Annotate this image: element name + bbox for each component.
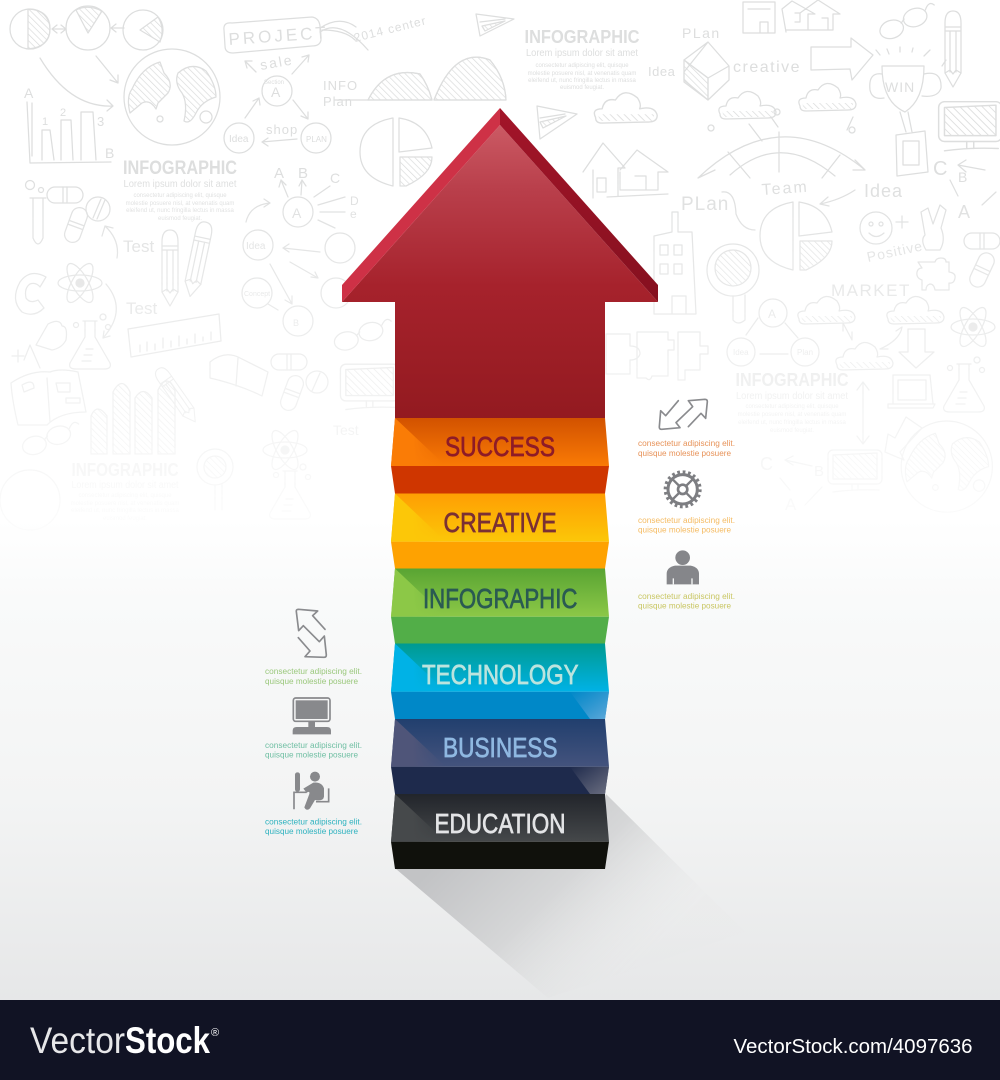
- doodle: trophy: [870, 47, 946, 176]
- doodle: section A diagram: [224, 51, 331, 153]
- big red arrow: [342, 108, 658, 418]
- doodle: bar chart: B: [105, 145, 114, 161]
- doodle: section A network: Idea: [246, 241, 266, 252]
- icon: person at desk: [294, 772, 329, 810]
- doodle: letters C A B with arrows: A: [958, 202, 970, 222]
- doodle: market: MARKET: [831, 281, 911, 300]
- doodle: hatched bars: [91, 381, 175, 454]
- doodle: info block right: euismod feugiat.: [770, 428, 814, 434]
- callout text: amber: quisque molestie posuere: [638, 524, 731, 534]
- doodle: section A network: B: [293, 318, 299, 328]
- doodle: lower right letters: A: [785, 495, 797, 514]
- doodle: cloud and house: [583, 93, 668, 198]
- doodle: glasses and pencil: [876, 2, 961, 87]
- doodle: info block top centre: eleifend ut, nunc fringilla lectus in massa: [528, 78, 637, 84]
- doodle: atom and flask right: [944, 304, 995, 412]
- doodle: info block left: Lorem ipsum dolor sit amet: [124, 179, 237, 190]
- doodle: info block right: molestie posuere nisl, at venenatis quam: [738, 412, 846, 418]
- callout text: olive: quisque molestie posuere: [638, 600, 731, 610]
- doodle: lower right letters: C: [760, 454, 773, 474]
- doodle: info block top centre: [524, 27, 640, 91]
- doodle: center domes: 2014 center: [352, 13, 428, 45]
- doodle: info block left: INFOGRAPHIC: [123, 158, 237, 179]
- doodle: info block right: INFOGRAPHIC: [736, 370, 849, 390]
- doodle: smiley, peace and positive: [860, 205, 946, 265]
- doodle: letters C A B with arrows: B: [958, 169, 967, 185]
- doodle: section A triangle: A: [768, 307, 776, 321]
- doodle: info block top centre: INFOGRAPHIC: [524, 27, 640, 47]
- doodle: smiley, peace and positive: Positive: [865, 237, 924, 265]
- doodle: info block lower left: euismod feugiat.: [103, 516, 147, 522]
- arrow left bevel: [342, 108, 500, 302]
- doodle: section A triangle: [727, 299, 819, 366]
- callout text: teal green: quisque molestie posuere: [265, 750, 358, 760]
- doodle: section A network: A: [292, 205, 302, 221]
- doodle: center domes: [335, 13, 506, 100]
- callout text: cyan: quisque molestie posuere: [265, 826, 358, 836]
- callout text: olive: [638, 591, 735, 610]
- doodle: cube with plan and creative: PLan: [682, 25, 721, 41]
- icon: gear: [666, 472, 700, 506]
- doodle: section A network: A: [274, 165, 284, 182]
- doodle: building and magnifier: [654, 212, 759, 323]
- footer logo: Vector: [30, 1020, 125, 1061]
- doodle: cube with plan and creative: Idea: [648, 64, 676, 79]
- callout text: light green: consectetur adipiscing elit.: [265, 666, 362, 676]
- right callouts: [638, 399, 735, 610]
- callout text: orange: consectetur adipiscing elit.: [638, 438, 735, 448]
- callout text: orange: quisque molestie posuere: [638, 448, 731, 458]
- step: technology: [391, 644, 609, 719]
- doodle: section A network: Concept: [244, 291, 270, 298]
- callout text: teal green: consectetur adipiscing elit.: [265, 740, 362, 750]
- doodle: cube with plan and creative: creative: [733, 59, 801, 76]
- doodle: section A network: B: [298, 165, 308, 182]
- doodle: info block left: [123, 158, 237, 222]
- callout text: cyan: [265, 816, 362, 836]
- footer logo: ®: [211, 1027, 219, 1039]
- step: infographic: INFOGRAPHIC: [423, 583, 578, 614]
- doodle: info block left: eleifend ut, nunc fringilla lectus in massa: [126, 208, 235, 214]
- doodle: section A network: [242, 165, 359, 336]
- doodle: paper planes: [476, 14, 577, 139]
- doodle: info block lower left: molestie posuere nisl, at venenatis quam: [71, 501, 179, 507]
- icon: arrows: [659, 399, 707, 429]
- footer bar: [0, 1000, 1000, 1080]
- doodle: team pie and labels: Idea: [864, 181, 903, 201]
- doodle: pencils with test label: [123, 220, 214, 306]
- doodle: info plan: Plan: [323, 94, 353, 109]
- doodle: section A triangle: Plan: [797, 348, 813, 357]
- doodle: section A diagram: sale: [259, 51, 295, 73]
- doodle: bar chart: 3: [97, 114, 104, 129]
- doodle: laptop: [888, 375, 935, 408]
- background doodles: [10, 0, 1000, 476]
- step: success: SUCCESS: [445, 431, 555, 462]
- doodle: block arrow: [811, 38, 873, 80]
- doodle: section A network: D: [350, 194, 359, 208]
- doodle: section A diagram: PLAN: [306, 135, 327, 144]
- doodle: C atom AB flask left: [12, 260, 116, 369]
- arrow right bevel: [500, 108, 658, 302]
- doodle: glasses and monitor centre: [332, 318, 399, 438]
- doodle: section A diagram: shop: [266, 122, 298, 137]
- doodle: centre left book pills pencil atom: [153, 354, 328, 519]
- footer logo: Stock: [125, 1020, 210, 1061]
- icon: computer: [293, 698, 331, 734]
- doodle: top right buildings: [743, 0, 840, 33]
- doodle: info plan: [324, 81, 356, 106]
- doodle: cube with plan and creative: [648, 25, 801, 100]
- callout text: light green: quisque molestie posuere: [265, 676, 358, 686]
- doodle: team pie and labels: [681, 179, 903, 270]
- step: education: [391, 794, 609, 869]
- doodle: bar chart: A: [24, 85, 34, 101]
- doodle: bar chart: 2: [60, 107, 66, 119]
- doodle: ruler: [126, 299, 221, 357]
- doodle: info block top centre: euismod feugiat.: [560, 85, 604, 91]
- doodle: lower right letters: B: [814, 463, 824, 480]
- doodle: test tube and pills: [26, 180, 118, 258]
- doodle: section A diagram: Idea: [229, 134, 249, 145]
- doodle: bar chart: 1: [42, 116, 48, 128]
- callout text: teal green: [265, 740, 362, 760]
- footer url: VectorStock.com/4097636: [734, 1036, 972, 1058]
- doodle: team pie and labels: PLan: [681, 194, 729, 215]
- arrow face: [342, 125, 658, 418]
- step: creative: CREATIVE: [444, 507, 556, 538]
- doodle: ruler: Test: [126, 299, 157, 318]
- doodle: info block right: [736, 370, 849, 434]
- icon: person: [667, 550, 699, 584]
- doodle: project tag: [224, 17, 368, 53]
- callout text: orange: [638, 438, 735, 458]
- step: infographic: [391, 568, 609, 644]
- doodle: three pie circles: [10, 6, 163, 50]
- doodle: info plan: INFO: [323, 78, 358, 93]
- step: business: [391, 719, 609, 794]
- doodle: pie chart centre: [360, 118, 432, 186]
- step: education: EDUCATION: [434, 808, 566, 839]
- doodle: info block lower left: consectetur adipiscing elit, quisque: [78, 493, 172, 499]
- doodle: lower left globe and magnifier: [0, 449, 233, 530]
- long shadow: [396, 794, 745, 998]
- doodle: section A network: C: [330, 170, 340, 186]
- doodle: section A diagram: A: [271, 84, 281, 100]
- doodle: glasses left: [20, 421, 83, 457]
- doodle: info block top centre: Lorem ipsum dolor sit amet: [526, 48, 638, 59]
- step: success: [391, 418, 609, 494]
- doodle: puzzle centre: [606, 332, 708, 380]
- doodle: info block lower left: Lorem ipsum dolor sit amet: [72, 480, 179, 491]
- doodle: info block top centre: consectetur adipiscing elit, quisque: [535, 63, 629, 69]
- doodle: lower right letters: [760, 454, 824, 514]
- doodle: pills and puzzle right: [917, 233, 1000, 290]
- step: creative: [391, 494, 609, 568]
- doodle: letters C A B with arrows: C: [933, 158, 947, 180]
- callout text: light green: [265, 666, 362, 686]
- callout text: cyan: consectetur adipiscing elit.: [265, 816, 362, 826]
- step: technology: TECHNOLOGY: [422, 659, 579, 690]
- doodle: info block lower left: [71, 460, 180, 522]
- doodle: project tag: PROJECT: [228, 23, 329, 49]
- icon: arrows vertical: [296, 609, 326, 657]
- doodle: arrows and lower right globe: [828, 382, 992, 476]
- callout text: olive: consectetur adipiscing elit.: [638, 591, 735, 601]
- doodle: bar chart: [24, 85, 114, 163]
- doodle: trophy: WIN: [885, 79, 915, 95]
- doodle: info block left: consectetur adipiscing elit, quisque: [133, 193, 227, 199]
- doodle: info block right: eleifend ut, nunc fringilla lectus in massa: [738, 420, 847, 426]
- callout text: amber: consectetur adipiscing elit.: [638, 515, 735, 525]
- doodle: market clouds: [798, 296, 944, 370]
- footer logo: [30, 1020, 219, 1061]
- doodle: clouds and arc: [698, 83, 865, 178]
- doodle: info block right: Lorem ipsum dolor sit amet: [736, 391, 848, 402]
- doodle: info block lower left: eleifend ut, nunc fringilla lectus in massa: [71, 508, 180, 514]
- doodle: info block lower left: INFOGRAPHIC: [72, 460, 179, 480]
- doodle: info block left: euismod feugiat.: [158, 216, 202, 222]
- step: business: BUSINESS: [443, 732, 558, 763]
- doodle: letters C A B with arrows: [933, 158, 996, 222]
- doodle: pencils with test label: Test: [123, 237, 154, 256]
- doodle: team pie and labels: Team: [761, 179, 809, 199]
- doodle: section A network: e: [350, 207, 357, 221]
- doodle: glasses and monitor centre: Test: [333, 422, 359, 438]
- doodle: info block right: consectetur adipiscing elit, quisque: [745, 404, 839, 410]
- doodle: globe with arrows: [40, 49, 220, 145]
- callout text: amber: [638, 515, 735, 534]
- doodle: section A triangle: Idea: [733, 348, 749, 357]
- doodle: info block left: molestie posuere nisl, at venenatis quam: [126, 201, 234, 207]
- doodle: section A diagram: Section: [264, 80, 284, 86]
- left callouts: [265, 609, 362, 836]
- doodle: info block top centre: molestie posuere nisl, at venenatis quam: [528, 71, 636, 77]
- doodle: monitor right: [939, 102, 1000, 151]
- doodle: open book left: [11, 370, 86, 425]
